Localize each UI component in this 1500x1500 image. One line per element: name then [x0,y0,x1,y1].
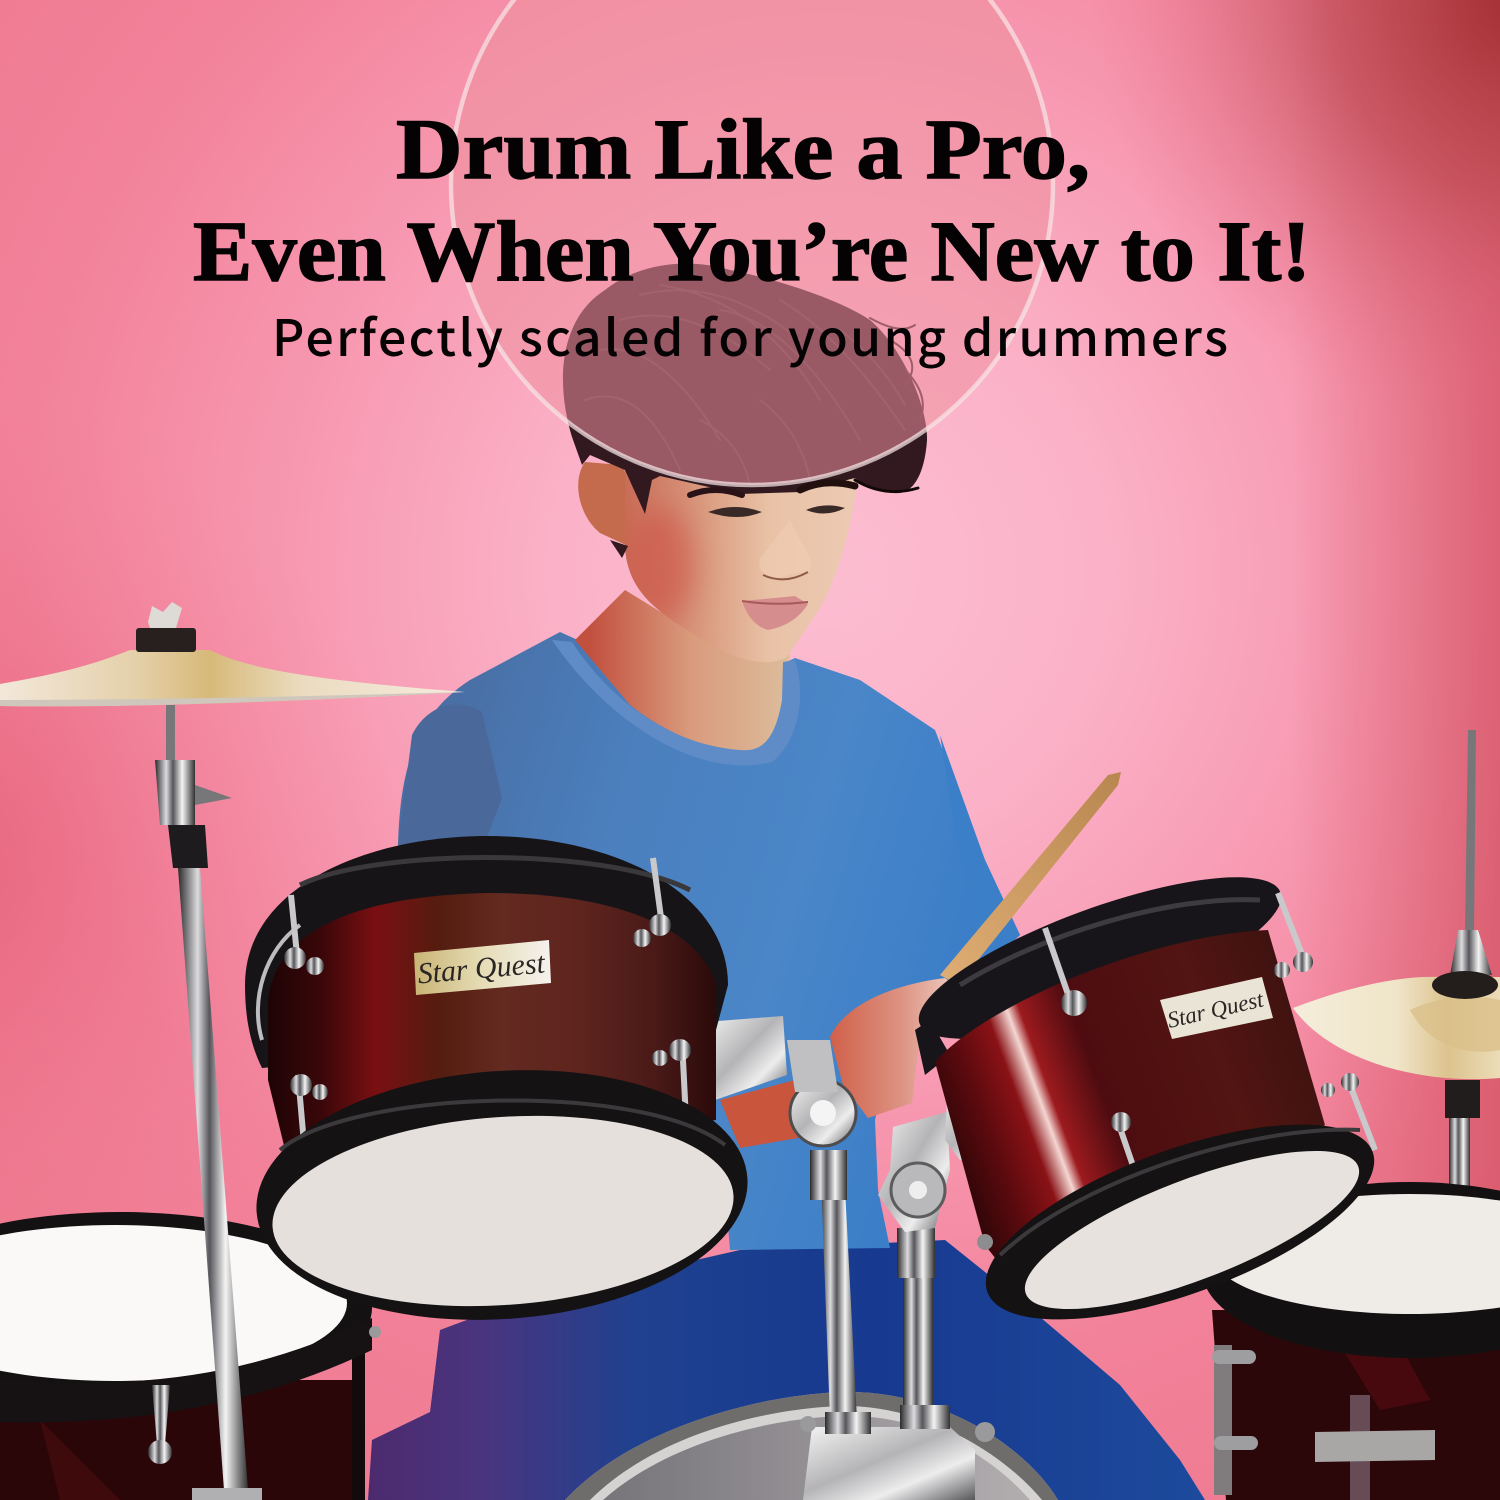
bracket [1315,1430,1435,1462]
drumstick [940,772,1121,985]
shell [935,930,1325,1290]
right tom drum [902,845,1397,1360]
nose [759,520,811,577]
tom badge [1160,977,1273,1039]
bottom left drum [0,1212,381,1500]
left tom drum [245,836,756,1336]
tom badge: Star Quest [1165,986,1266,1033]
batter head [266,1101,740,1321]
neck [575,590,790,751]
face [625,450,860,662]
lugs [291,858,686,1155]
collar [552,640,800,765]
trousers [368,1240,1205,1500]
top hoop [902,845,1298,1071]
strap [1350,1395,1370,1500]
t-shirt [398,632,1020,1250]
hand [830,978,960,1118]
stool seat [845,1270,880,1395]
base casting [803,1427,975,1500]
bass drum and mounts [565,1016,1058,1500]
under-ear hair [610,540,628,558]
heading: Even When You’re New to It! [193,203,1311,299]
heading [193,101,1311,299]
bottom hoop [963,1084,1397,1360]
bottom hoop [248,1054,756,1336]
bottom right drum [1202,1182,1500,1500]
felt washer [1432,971,1498,999]
left cymbal [0,602,465,765]
left mount pole [820,1150,857,1420]
felt [136,628,196,652]
left sleeve [398,704,502,850]
subtitle: Perfectly scaled for young drummers [272,299,1228,371]
left cymbal stand pole [155,760,262,1500]
right tom clamp [878,1112,950,1232]
forearm [720,1080,840,1148]
badge: Star Quest [416,946,547,991]
right cymbal and stand [1293,730,1500,1190]
hair [563,264,927,514]
top hoop [245,836,728,1068]
right mount pole [903,1275,933,1410]
ball joint [790,1080,856,1146]
ear [578,462,642,546]
drummer boy [368,264,1205,1500]
shell [268,893,716,1170]
cheek flush [626,507,694,623]
mouth [742,596,808,630]
lugs [1045,893,1375,1195]
fringe and fine strands [585,285,923,495]
heading: Drum Like a Pro, [396,101,1090,197]
translucent circle [451,0,1053,485]
eyes [708,507,762,517]
wing nut [148,602,182,628]
left tom clamp [787,1040,838,1092]
tension ring [258,925,300,1040]
batter head [1008,1120,1376,1340]
